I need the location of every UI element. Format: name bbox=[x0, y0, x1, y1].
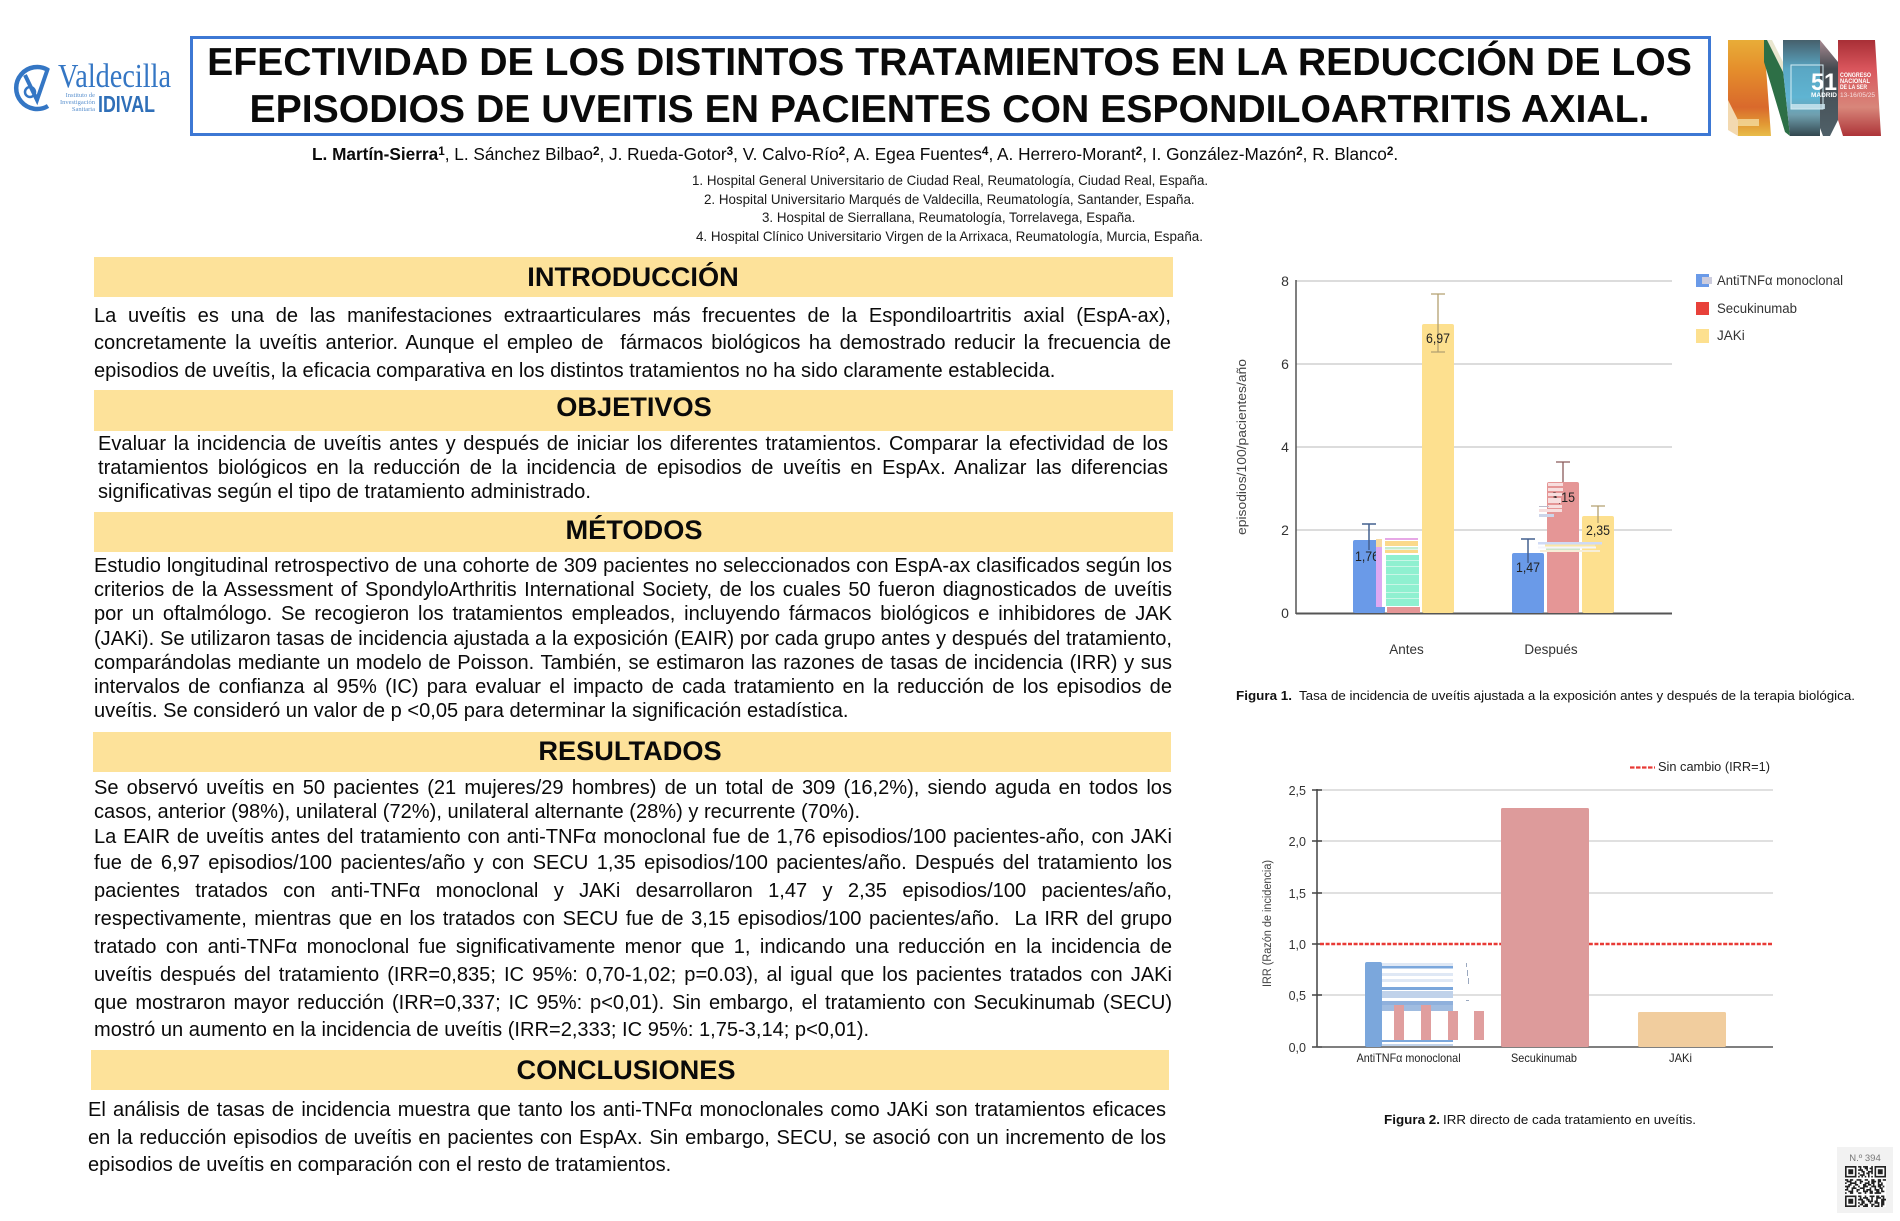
legend: Secukinumab bbox=[1717, 301, 1797, 316]
heading: Métodos: MÉTODOS bbox=[566, 514, 702, 545]
bars: después: 2,35 bbox=[1586, 522, 1610, 538]
y axis labels: 8 bbox=[1281, 273, 1289, 289]
text: resultados bbox=[94, 777, 1172, 1041]
text: métodos: intervalos de confianza al 95% (IC) para evaluar el impacto de cada tratamiento en la reducción de los episodios de bbox=[94, 676, 1172, 698]
logo: 51 Congreso Nacional de la SER: NACIONAL bbox=[1840, 79, 1870, 85]
text: métodos: por un oftalmólogo. Se recogieron los tratamientos empleados, incluyendo fármacos biológicos e inhibidores de JAK bbox=[94, 603, 1172, 625]
caption: figura 1: Tasa de incidencia de uveítis ajustada a la exposición antes y después de la terapia biológica. bbox=[1299, 688, 1855, 703]
heading: Conclusiones bbox=[91, 1050, 1169, 1090]
text: objetivos bbox=[98, 433, 1168, 503]
heading: Resultados: RESULTADOS bbox=[538, 735, 722, 766]
text: conclusiones: episodios de uveítis en comparación con el resto de tratamientos. bbox=[88, 1154, 671, 1176]
heading: Introducción bbox=[94, 257, 1173, 297]
category labels: Antes bbox=[1389, 642, 1424, 657]
affiliations: 4. Hospital Clínico Universitario Virgen de la Arrixaca, Reumatología, Murcia, España. bbox=[696, 229, 1203, 244]
heading: Conclusiones: CONCLUSIONES bbox=[516, 1054, 736, 1085]
heading: Introducción: INTRODUCCIÓN bbox=[527, 261, 739, 292]
bars: antes: 6,97 bbox=[1426, 330, 1450, 346]
y axis labels: 1,5 bbox=[1289, 887, 1306, 901]
logo: 51 Congreso Nacional de la SER: CONGRESO bbox=[1840, 73, 1871, 79]
bar: AntiTNF monoclonal bbox=[1365, 962, 1484, 1047]
authors: L. Martín-Sierra1, L. Sánchez Bilbao2, J. Rueda-Gotor3, V. Calvo-Río2, A. Egea Fuentes4, A. Herrero-Morant2, I. González-Mazón2, R. Blanco2. bbox=[312, 144, 1398, 164]
y axis labels: 1,0 bbox=[1289, 938, 1306, 952]
bars: después bbox=[1512, 462, 1614, 613]
y axis labels: 4 bbox=[1281, 439, 1289, 455]
text: introducción bbox=[94, 304, 1171, 382]
bar: Secukinumab bbox=[1501, 808, 1589, 1047]
text: resultados: pacientes tratados con anti-TNFα monoclonal y JAKi desarrollaron 1,47 y 2,35 episodios/100 pacientes/año, bbox=[94, 880, 1172, 902]
text: resultados: casos, anterior (98%), unilateral (72%), unilateral alternante (28%) y recurrente (70%). bbox=[94, 801, 860, 823]
logo: 51 Congreso Nacional de la SER: MADRID bbox=[1811, 92, 1837, 99]
y axis labels: 2 bbox=[1281, 522, 1289, 538]
text: resultados: respectivamente, mientras que en los tratados con SECU fue de 3,15 episodios/100 pacientes/año. La IRR del grupo bbox=[94, 908, 1172, 930]
y axis title: episodios/100/pacientes/año bbox=[1234, 359, 1249, 535]
title: EPISODIOS DE UVEITIS EN PACIENTES CON ESPONDILOARTRITIS AXIAL. bbox=[249, 88, 1650, 131]
text: métodos: comparándolas mediante un modelo de Poisson. También, se estimaron las razones de tasas de incidencia (IRR) y sus bbox=[94, 652, 1172, 674]
logo: 51 Congreso Nacional de la SER: 13-16/05/25 bbox=[1840, 93, 1876, 99]
y axis labels: 0,0 bbox=[1289, 1041, 1306, 1055]
text: métodos: Estudio longitudinal retrospectivo de una cohorte de 309 pacientes no seleccionados con EspA-ax clasificados según los bbox=[94, 555, 1172, 577]
artefact overlay: antes bbox=[1376, 537, 1420, 607]
logo: Valdecilla IDIVAL: Investigación bbox=[60, 99, 96, 106]
category labels: Después bbox=[1524, 642, 1578, 657]
QR code with poster number: N.º 394 bbox=[1849, 1153, 1881, 1164]
text: objetivos: Evaluar la incidencia de uveítis antes y después de iniciar los diferentes tratamientos. Comparar la efectividad de los bbox=[98, 433, 1168, 455]
logo: 51 Congreso Nacional de la SER: DE LA SER bbox=[1840, 85, 1868, 91]
category labels: AntiTNFα monoclonal bbox=[1357, 1051, 1461, 1065]
bars: después: 1,47 bbox=[1516, 559, 1540, 575]
category labels bbox=[1357, 1051, 1692, 1065]
y axis labels bbox=[1289, 784, 1306, 1055]
threshold line bbox=[1320, 943, 1773, 945]
text: resultados: que mostraron mayor reducción (IRR=0,337; IC 95%: p<0,01). Sin embargo, el tratamiento con Secukinumab (SECU) bbox=[94, 992, 1172, 1014]
caption: figura 2: Figura 2. bbox=[1384, 1112, 1440, 1127]
category labels: Secukinumab bbox=[1511, 1051, 1577, 1065]
logo: Valdecilla IDIVAL bbox=[14, 58, 171, 117]
y axis title: IRR (Razón de incidencia) bbox=[1262, 860, 1274, 987]
logo: 51 Congreso Nacional de la SER: 51 bbox=[1811, 69, 1837, 96]
legend: JAKi bbox=[1717, 328, 1745, 343]
category labels bbox=[1389, 642, 1578, 657]
text: métodos bbox=[94, 555, 1172, 722]
QR code with poster number bbox=[1837, 1147, 1893, 1213]
y axis labels: 0 bbox=[1281, 605, 1289, 621]
text: objetivos: significativas según el tipo de tratamiento administrado. bbox=[98, 481, 591, 503]
logo: Valdecilla IDIVAL: IDIVAL bbox=[98, 91, 155, 117]
bars: antes bbox=[1353, 294, 1454, 613]
text: introducción: La uveítis es una de las manifestaciones extraarticulares más frecuentes de la Espondiloartritis axial (EspA-ax), bbox=[94, 304, 1171, 326]
text: métodos: (JAKi). Se utilizaron tasas de incidencia ajustada a la exposición (EAIR) por cada grupo antes y después del tratamiento, bbox=[94, 628, 1172, 650]
y axis labels: 0,5 bbox=[1289, 989, 1306, 1003]
y axis labels: 2,5 bbox=[1289, 784, 1306, 798]
text: resultados: tratado con anti-TNFα monoclonal fue significativamente menor que 1, indicando una reducción en la incidencia de bbox=[94, 936, 1172, 958]
affiliations: 1. Hospital General Universitario de Ciudad Real, Reumatología, Ciudad Real, España. bbox=[692, 173, 1208, 188]
text: conclusiones bbox=[88, 1099, 1166, 1176]
title bbox=[190, 36, 1711, 136]
bars: después: 3,15 bbox=[1551, 489, 1575, 505]
text: resultados: uveítis después del tratamiento (IRR=0,835; IC 95%: 0,70-1,02; p=0.03), al igual que los pacientes tratados con JAKi bbox=[94, 964, 1172, 986]
y axis labels: 2,0 bbox=[1289, 835, 1306, 849]
affiliations: 3. Hospital de Sierrallana, Reumatología, Torrelavega, España. bbox=[762, 210, 1135, 225]
artefact overlay: después bbox=[1538, 483, 1602, 552]
text: conclusiones: El análisis de tasas de incidencia muestra que tanto los anti-TNFα monoclonales como JAKi son tratamientos eficaces bbox=[88, 1099, 1166, 1121]
text: resultados: Se observó uveítis en 50 pacientes (21 mujeres/29 hombres) de un total de 309 (16,2%), siendo aguda en todos los bbox=[94, 777, 1172, 799]
heading: Objetivos bbox=[94, 390, 1173, 431]
caption: figura 1: Figura 1. bbox=[1236, 688, 1292, 703]
caption: figura 2: IRR directo de cada tratamiento en uveítis. bbox=[1443, 1112, 1696, 1127]
text: introducción: episodios de uveítis, la eficacia comparativa en los distintos tratamientos no ha sido claramente establecida. bbox=[94, 360, 1055, 382]
text: conclusiones: en la reducción episodios de uveítis en pacientes con EspAx. Sin embargo, SECU, se asoció con un incremento de los bbox=[88, 1127, 1166, 1149]
heading: Resultados bbox=[93, 732, 1171, 772]
logo: Valdecilla IDIVAL: Instituto de bbox=[66, 92, 95, 99]
text: métodos: criterios de la Assessment of SpondyloArthritis International Society, de los cuales 50 fueron diagnosticados de uveítis bbox=[94, 579, 1172, 601]
logo: Valdecilla IDIVAL: Sanitaria bbox=[72, 106, 95, 113]
title: EFECTIVIDAD DE LOS DISTINTOS TRATAMIENTOS EN LA REDUCCIÓN DE LOS bbox=[207, 41, 1692, 84]
text: objetivos: tratamientos biológicos en la reducción de la incidencia de episodios de uveítis en EspAx. Analizar las diferencias bbox=[98, 457, 1168, 479]
affiliations bbox=[692, 173, 1208, 244]
category labels: JAKi bbox=[1669, 1051, 1692, 1065]
heading: Métodos bbox=[94, 512, 1173, 552]
legend: Sin cambio (IRR=1) bbox=[1658, 760, 1770, 774]
affiliations: 2. Hospital Universitario Marqués de Valdecilla, Reumatología, Santander, España. bbox=[704, 192, 1195, 206]
text: métodos: uveítis. Se consideró un valor de p <0,05 para determinar la significación estadística. bbox=[94, 700, 848, 722]
legend bbox=[1696, 273, 1843, 343]
logo: 51 Congreso Nacional de la SER bbox=[1728, 40, 1881, 136]
y axis labels: 6 bbox=[1281, 356, 1289, 372]
bars: antes: 1,76 bbox=[1355, 548, 1379, 564]
text: resultados: La EAIR de uveítis antes del tratamiento con anti-TNFα monoclonal fue de 1,76 episodios/100 pacientes-año, con JAKi bbox=[94, 826, 1172, 848]
text: resultados: mostró un aumento en la incidencia de uveítis (IRR=2,333; IC 95%: 1,75-3,14; p<0,01). bbox=[94, 1019, 869, 1041]
chart: figura 1 tasa de incidencia bbox=[1234, 273, 1855, 703]
y axis labels bbox=[1281, 273, 1289, 621]
bar: JAKi bbox=[1638, 1012, 1726, 1047]
legend: AntiTNFα monoclonal bbox=[1717, 273, 1843, 288]
text: resultados: fue de 6,97 episodios/100 pacientes/año y con SECU 1,35 episodios/100 pacientes/año. Después del tratamiento los bbox=[94, 852, 1172, 874]
chart: figura 2 IRR bbox=[1262, 760, 1773, 1127]
heading: Objetivos: OBJETIVOS bbox=[556, 391, 712, 422]
text: introducción: concretamente la uveítis anterior. Aunque el empleo de fármacos biológicos ha demostrado reducir la frecuencia de bbox=[94, 332, 1171, 354]
